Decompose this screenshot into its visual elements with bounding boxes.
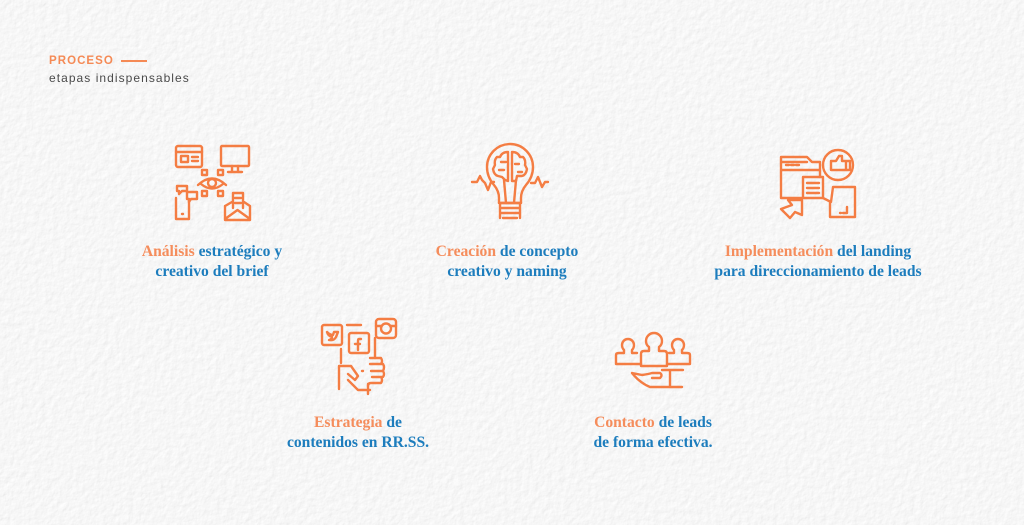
subheading: etapas indispensables <box>49 71 190 85</box>
caption: estrategia: contenidos en RR.SS. <box>287 434 429 451</box>
caption: analisis: creativo del brief <box>155 263 269 280</box>
caption: analisis <box>142 243 282 280</box>
caption: estrategia <box>287 414 429 451</box>
icon: landing page with like <box>781 150 855 218</box>
caption: creacion: creativo y naming <box>447 263 567 280</box>
caption: implementacion: para direccionamiento de leads <box>714 263 922 280</box>
caption: contacto: de forma efectiva. <box>593 434 713 451</box>
caption: implementacion <box>714 243 922 280</box>
icon: social media hand <box>322 319 396 394</box>
caption: contacto: Contacto de leads <box>594 414 712 431</box>
icon: leads held on hand <box>616 333 690 387</box>
heading rule <box>121 60 147 62</box>
caption: creacion: Creación de concepto <box>436 243 578 260</box>
icon: light bulb with brain <box>472 144 548 218</box>
icon: analysis eye and devices <box>176 146 250 220</box>
caption: implementacion: Implementación del landing <box>725 243 911 260</box>
header: proceso <box>49 55 190 85</box>
caption: creacion <box>436 243 578 280</box>
caption: analisis: Análisis estratégico y <box>142 243 282 260</box>
caption: estrategia: Estrategia de <box>314 414 402 431</box>
heading label: PROCESO <box>49 55 114 67</box>
caption: contacto <box>593 414 713 451</box>
